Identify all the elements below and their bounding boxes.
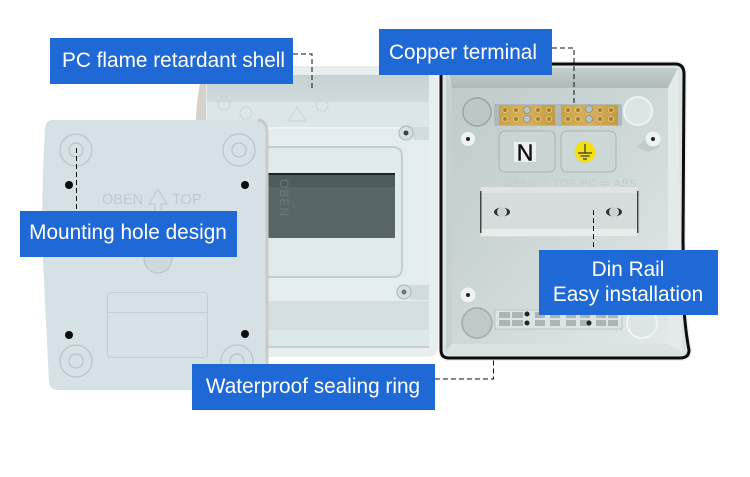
leader: waterproof ring: [435, 360, 494, 379]
screw posts: [408, 127, 429, 140]
label: Din Rail Easy installation: Din Rail: [592, 258, 664, 281]
leader: din rail: [592, 210, 594, 250]
label: Din Rail Easy installation: [539, 250, 718, 315]
right box: open base with sealing ring: [441, 64, 689, 358]
cable entry knockouts: [463, 98, 491, 126]
label recess: [108, 292, 208, 358]
earth symbol label: [561, 131, 616, 172]
bottom cable clamp: [495, 310, 622, 329]
label: Copper terminal: Copper terminal: [389, 41, 537, 64]
label: Mounting hole design: [20, 211, 237, 257]
embossed OPEN TOP text: OBEN △ TOP PC ⇌ ABS: [503, 178, 637, 190]
embossed OBEN TOP mark: [102, 189, 202, 212]
label: Mounting hole design: Mounting hole design: [29, 221, 227, 244]
din rail: [480, 187, 638, 237]
back cover panel: [42, 120, 267, 390]
label: PC flame retardant shell: [50, 38, 293, 84]
middle box: open front frame: [196, 66, 438, 357]
embossed recycling marks: [218, 98, 328, 121]
dark window: [267, 173, 395, 238]
leader: mounting hole: [76, 148, 78, 211]
label: Copper terminal: [379, 29, 552, 75]
middle box: open front frame: OBEN: [277, 179, 291, 217]
window bezel: [267, 147, 402, 277]
label: Waterproof sealing ring: Waterproof sealing ring: [206, 375, 420, 398]
mounting posts: [461, 132, 475, 146]
N label: [499, 131, 555, 172]
leader: copper terminal: [552, 48, 574, 105]
leader: PC shell: [293, 54, 312, 88]
label: PC flame retardant shell: PC flame retardant shell: [62, 49, 285, 72]
label: Din Rail Easy installation: Easy installation: [553, 283, 703, 306]
embossed OBEN TOP mark: TOP: [172, 192, 202, 208]
mounting holes: [65, 181, 249, 339]
centre screw recess: [144, 245, 172, 273]
label: Waterproof sealing ring: [192, 364, 435, 410]
embossed OBEN TOP mark: OBEN: [102, 192, 143, 208]
brass terminal blocks: [494, 104, 622, 126]
N label: N: [517, 140, 533, 166]
corner mounting bosses: [60, 134, 255, 377]
